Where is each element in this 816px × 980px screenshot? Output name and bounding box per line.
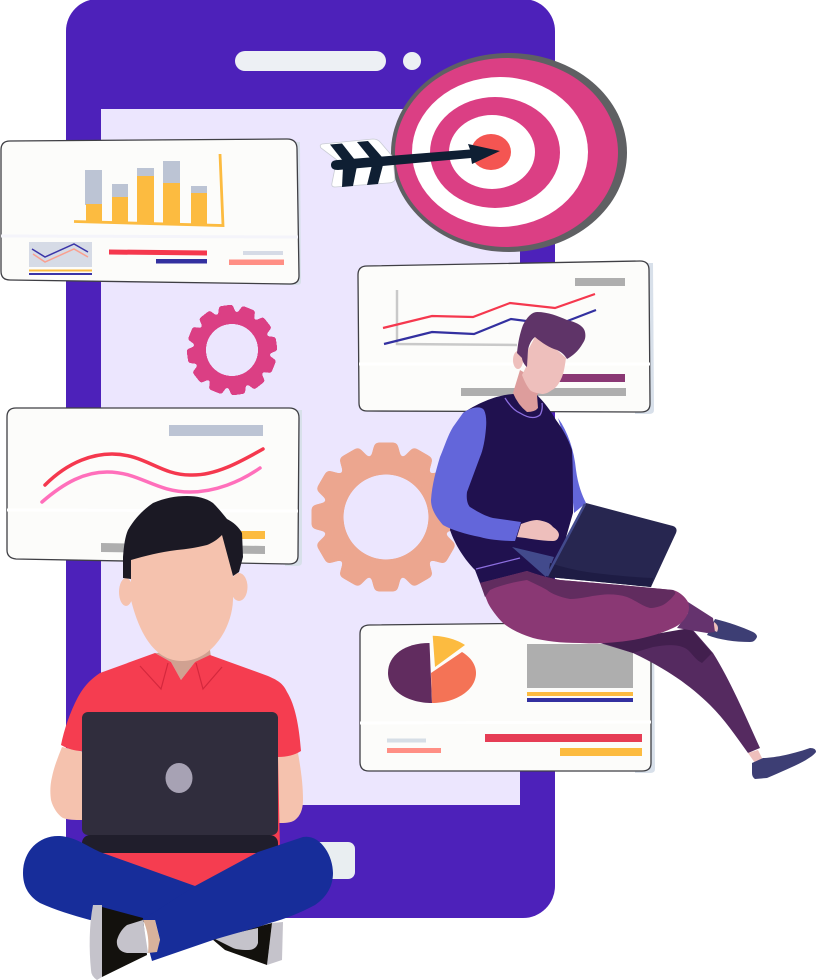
laptop logo [166, 763, 192, 793]
gear: salmon [313, 444, 459, 590]
collar [140, 663, 222, 689]
line chart [383, 290, 596, 345]
ear [513, 351, 523, 369]
card: line chart [358, 261, 654, 414]
sweater hem [476, 558, 520, 569]
hair [123, 496, 243, 579]
near arm [431, 407, 521, 541]
pie chart [388, 636, 476, 703]
legend bars [387, 734, 642, 756]
laptop [82, 712, 278, 853]
mini line chart [29, 242, 92, 275]
laptop [512, 503, 677, 587]
phone [66, 0, 555, 918]
right shoe [212, 923, 272, 965]
bar chart [74, 154, 223, 226]
front shoe [707, 619, 757, 642]
left shoe sole [90, 905, 102, 980]
legend bars [461, 278, 626, 396]
man sitting cross-legged with laptop [23, 496, 333, 980]
laptop edge [547, 504, 585, 576]
man sitting on top with laptop [431, 312, 816, 779]
back shoe [752, 748, 816, 779]
trousers [480, 571, 689, 643]
left leg [23, 836, 195, 922]
laptop lid [82, 712, 278, 835]
front calf [677, 602, 715, 633]
gear: pink [187, 305, 277, 395]
right shoe sole [267, 922, 283, 965]
hair [517, 312, 585, 367]
card: bar chart [1, 139, 301, 285]
phone home button [300, 842, 355, 879]
right leg [142, 837, 333, 961]
ear: left [119, 578, 133, 606]
laptop screen [548, 503, 677, 587]
face [131, 530, 233, 661]
phone body [66, 0, 555, 918]
target [391, 53, 627, 252]
arrow [320, 139, 500, 187]
neck [513, 370, 545, 412]
far arm [558, 418, 586, 513]
front ankle [713, 622, 718, 632]
left arm [50, 747, 85, 820]
face [522, 337, 566, 394]
laptop keyboard [512, 547, 554, 577]
right arm [278, 753, 303, 823]
left shoe [102, 907, 147, 977]
laptop base [82, 835, 278, 853]
phone speaker [235, 51, 386, 71]
back leg shade [603, 628, 712, 663]
torso [450, 394, 573, 583]
card: pie chart [360, 622, 655, 773]
shirt [61, 653, 301, 886]
ankle [143, 920, 160, 953]
back leg [600, 630, 760, 753]
sweater collar [505, 398, 542, 417]
ear: right [230, 573, 248, 601]
legend bars [101, 425, 265, 554]
grey block and lines [527, 644, 633, 702]
neck [155, 650, 211, 680]
legend bars [109, 250, 284, 265]
phone camera [403, 52, 421, 70]
right sock [213, 928, 258, 950]
laptop screen shade [548, 563, 653, 587]
phone screen [101, 109, 520, 805]
wave lines [42, 449, 263, 502]
hand [517, 520, 559, 541]
card: wave chart [7, 408, 302, 566]
back ankle [748, 750, 763, 763]
left sock [117, 920, 148, 953]
trousers shade [480, 571, 675, 608]
